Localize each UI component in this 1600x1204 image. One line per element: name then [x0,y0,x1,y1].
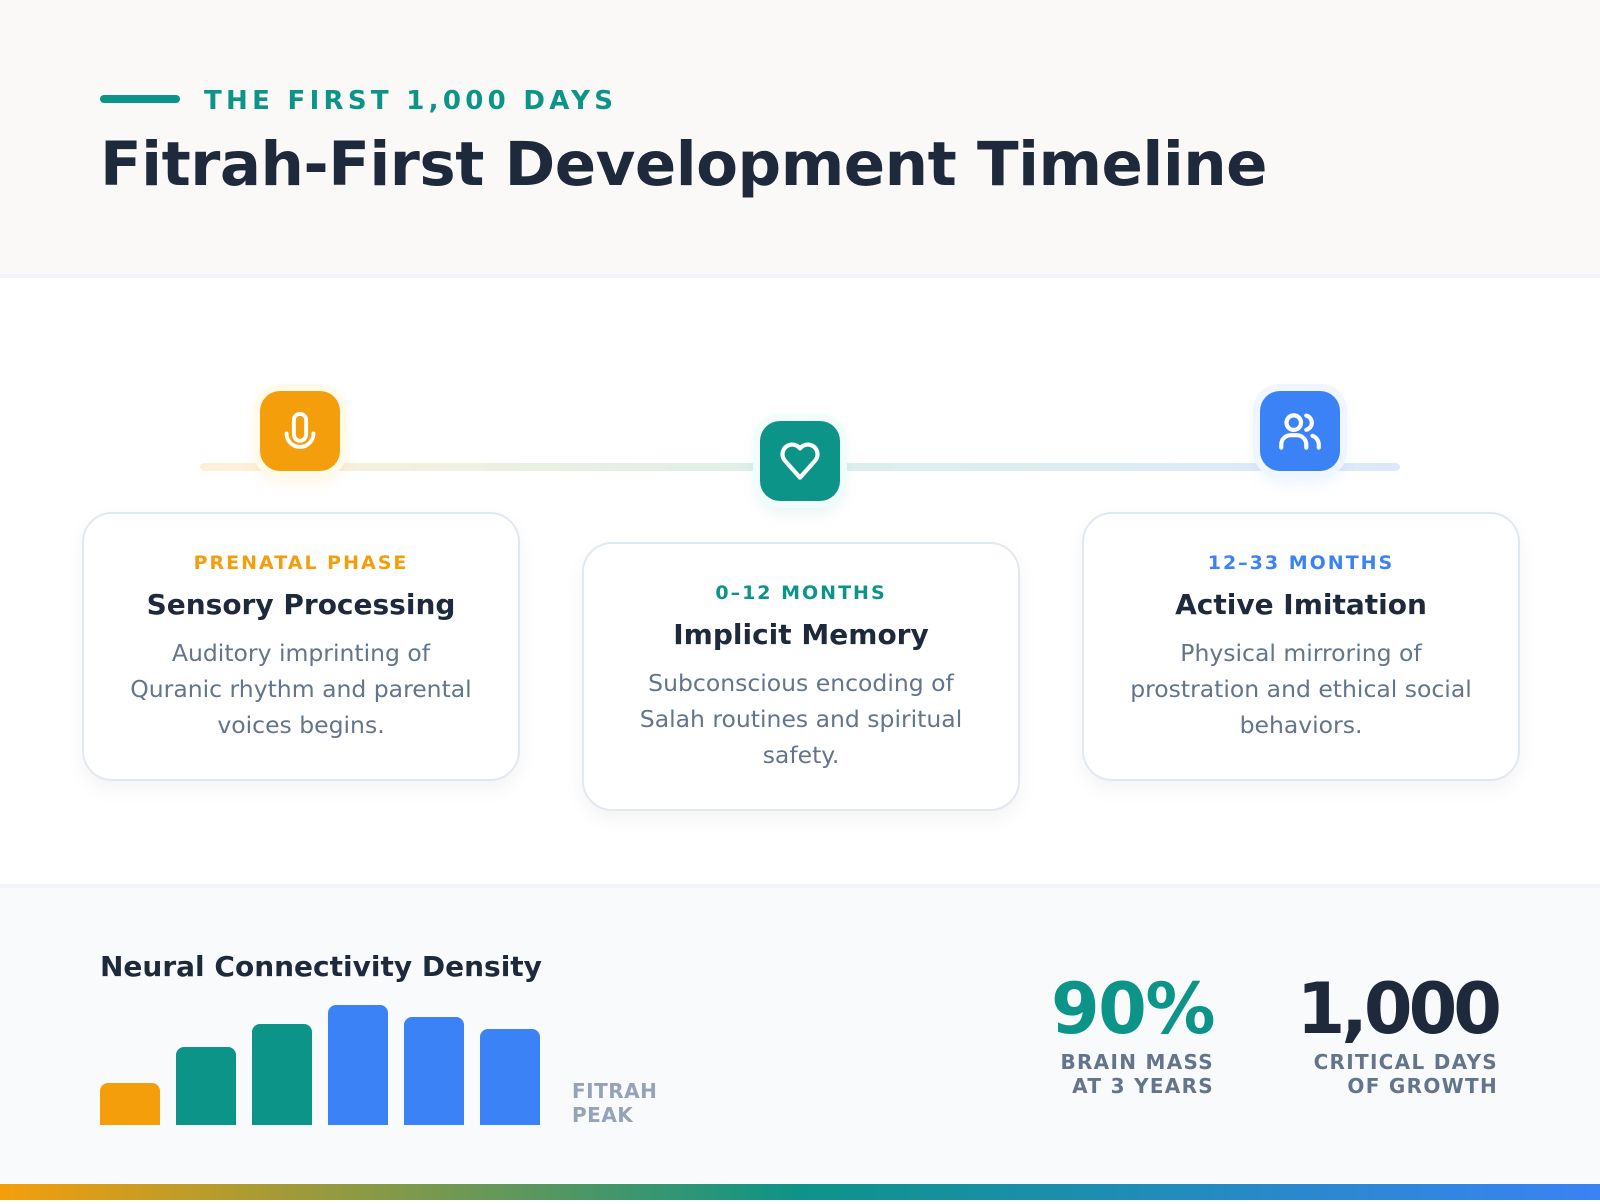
eyebrow: THE FIRST 1,000 DAYS [204,86,617,116]
card: 0-12 months: Implicit Memory [673,618,929,651]
stat: 90%: BRAIN MASS [1060,1050,1214,1074]
stat: 90% [1051,968,1214,1098]
fitrah peak label [572,1079,657,1127]
stat: 1,000: CRITICAL DAYS [1314,1050,1498,1074]
fitrah peak label: FITRAH [572,1079,657,1103]
stat: 1,000: OF GROWTH [1347,1074,1498,1098]
timeline line [200,463,1400,471]
stat: 90%: 90% [1051,968,1214,1050]
card: 0-12 months: 0–12 MONTHS [715,582,887,604]
card: 12-33 months: Active Imitation [1175,588,1427,621]
card: prenatal [82,512,520,781]
title: Fitrah-First Development Timeline [100,129,1267,200]
card: 0-12 months: Subconscious encoding of Salah routines and spiritual safety. [640,669,962,769]
icon: heart [760,421,840,501]
card: 0-12 months [582,542,1020,811]
bottom gradient bar [0,1184,1600,1200]
card: prenatal: Sensory Processing [147,588,455,621]
chart title: Neural Connectivity Density [100,950,542,983]
icon: users [1260,391,1340,471]
bar chart [100,1005,540,1125]
accent bar [100,95,180,103]
header [0,0,1600,278]
bottom panel [0,884,1600,1200]
card: 12-33 months: Physical mirroring of [1180,639,1422,667]
fitrah peak label: PEAK [572,1103,633,1127]
stat: 1,000: 1,000 [1297,968,1498,1050]
stat: 90%: AT 3 YEARS [1072,1074,1214,1098]
card: 12-33 months [1082,512,1520,781]
icon: microphone [260,391,340,471]
card: 12-33 months: prostration and ethical social behaviors. [1130,675,1472,739]
stat: 1,000 [1297,968,1499,1098]
card: prenatal: PRENATAL PHASE [194,552,408,574]
card: 12-33 months: 12–33 MONTHS [1208,552,1394,574]
card: prenatal: Auditory imprinting of Quranic rhythm and parental voices begins. [130,639,472,739]
